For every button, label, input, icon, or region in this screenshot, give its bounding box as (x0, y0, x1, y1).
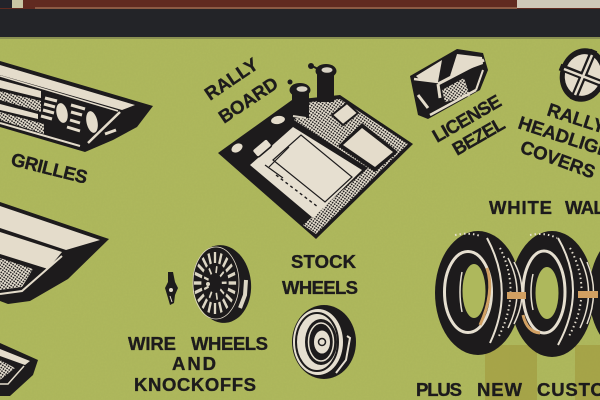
illustration: wire wheel (189, 242, 255, 326)
illustration: rally gauges (288, 63, 336, 118)
stains under tires (485, 345, 600, 400)
label: wire wheels and knockoffs: AND (172, 353, 216, 374)
label: rally board: RALLY (200, 53, 263, 104)
label: rally headlight covers (516, 99, 600, 182)
label: grilles: GRILLES (9, 149, 90, 188)
label: plus new custom (416, 379, 600, 400)
label: wire wheels and knockoffs: KNOCKOFFS (134, 374, 256, 395)
label: rally board: BOARD (214, 72, 282, 127)
label: white walls: WHITE (489, 197, 552, 218)
label: stock wheels (282, 251, 358, 298)
label: stock wheels: WHEELS (282, 277, 358, 298)
label: wire wheels and knockoffs: WHEELS (191, 333, 268, 354)
illustration: grille bottom (0, 343, 38, 396)
label: wire wheels and knockoffs (128, 333, 268, 395)
illustration: grille middle (0, 202, 109, 304)
label: rally headlight covers: COVERS (518, 136, 598, 182)
label: license bezel: LICENSE (428, 90, 505, 146)
label: white walls (489, 197, 600, 218)
label: stock wheels: STOCK (291, 251, 357, 272)
illustration: white wall tires (435, 231, 600, 357)
label: license bezel: BEZEL (448, 113, 508, 159)
label: wire wheels and knockoffs: WIRE (128, 333, 176, 354)
illustration: rally board (218, 63, 413, 239)
label: plus new custom: PLUS (416, 379, 462, 400)
label: rally board (200, 53, 282, 127)
illustration: license bezel (410, 49, 488, 119)
top border bands (0, 0, 600, 39)
label: plus new custom: NEW (477, 379, 523, 400)
illustration: rally headlight covers (554, 43, 600, 107)
illustration: knockoff (165, 272, 178, 305)
illustration: grille top (0, 61, 153, 152)
illustration: stock wheel (292, 305, 356, 379)
